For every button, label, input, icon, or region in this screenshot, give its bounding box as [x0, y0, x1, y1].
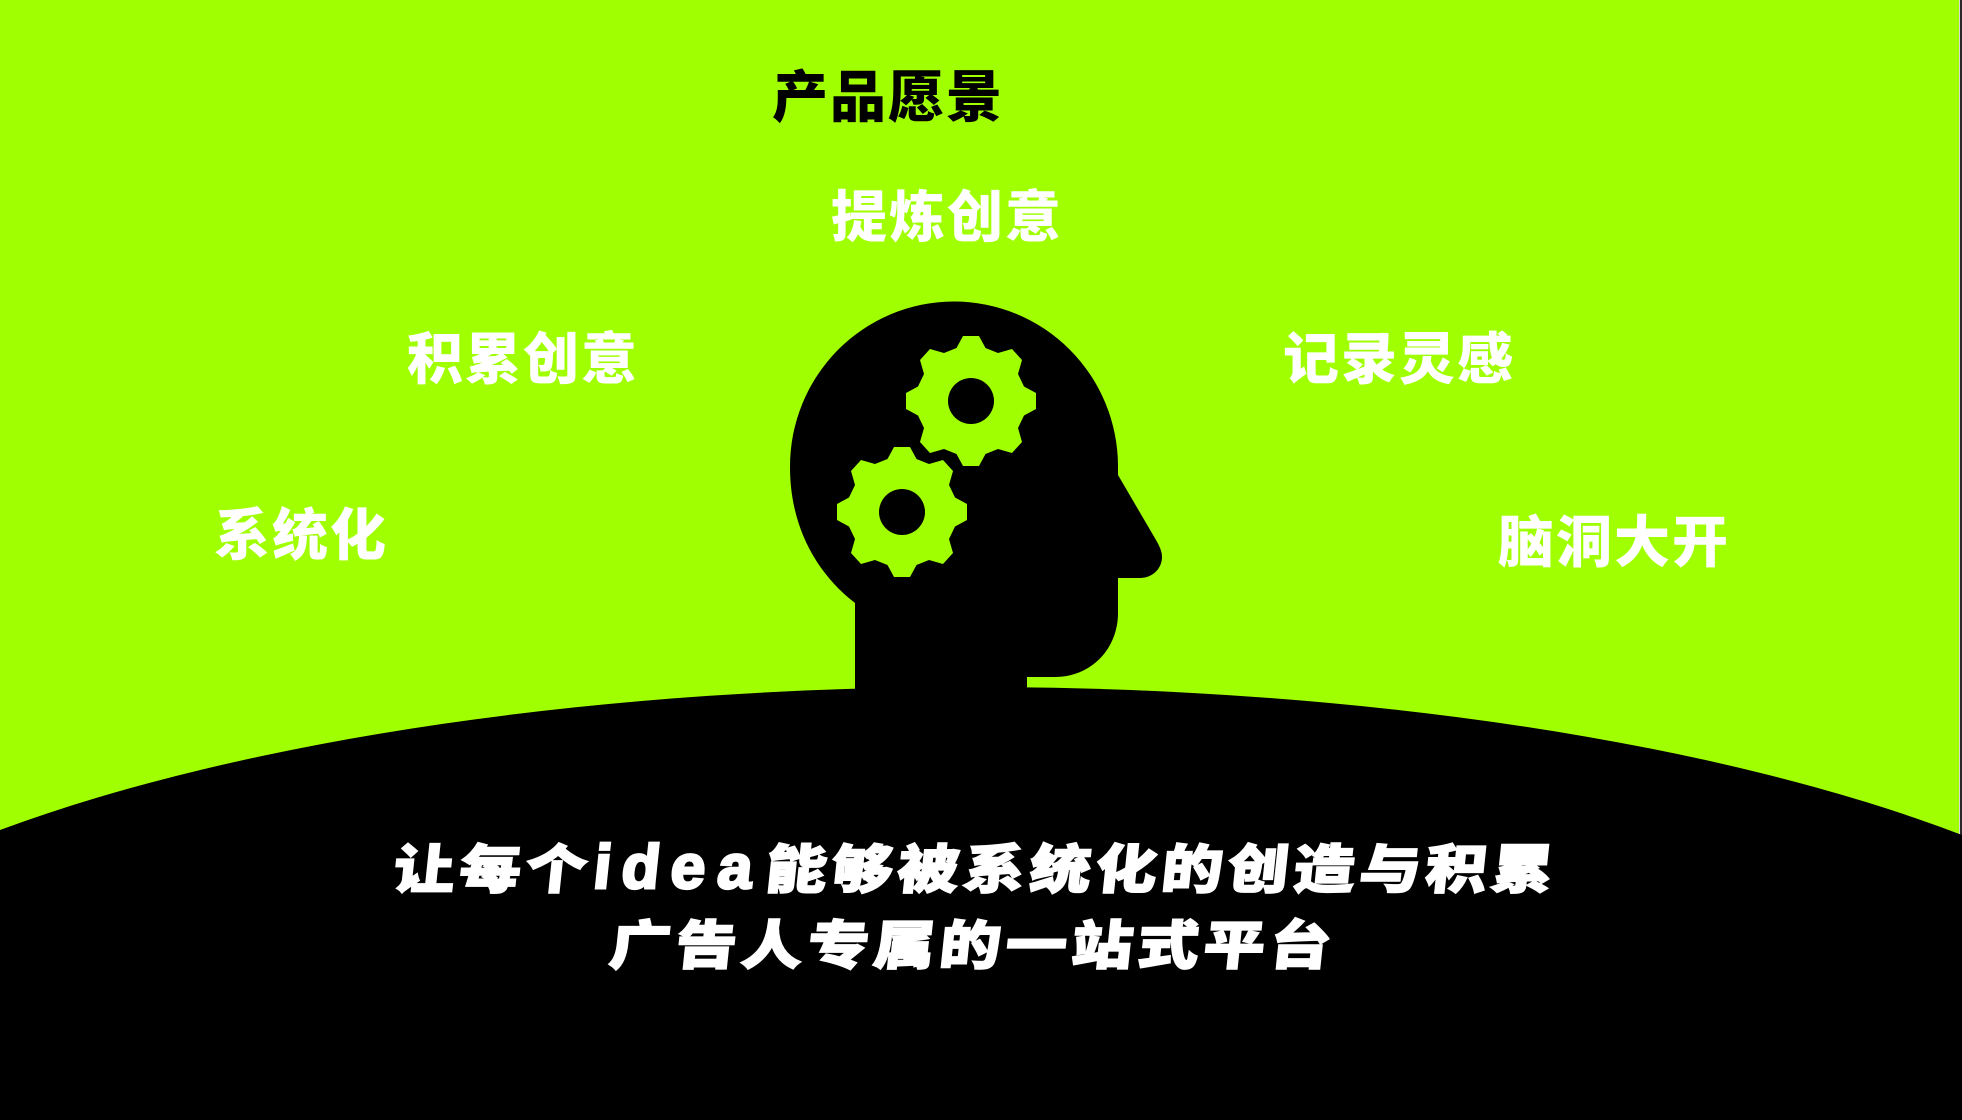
label: record inspiration: 记录灵感 [1283, 328, 1515, 391]
slogan line 1: 让每个 [391, 841, 590, 900]
label: refine ideas: 提炼创意 [831, 186, 1063, 249]
black hill base [0, 687, 1962, 1120]
slogan line 1: idea [591, 833, 757, 902]
icon: head with gears [790, 301, 1162, 700]
label: accumulate ideas: 积累创意 [407, 328, 639, 391]
head silhouette [790, 301, 1162, 700]
label: open mind: 脑洞大开 [1498, 511, 1730, 574]
icon: lower gear [837, 447, 967, 577]
slogan line 1: 能够被系统化的创造与积累 [763, 841, 1556, 900]
icon: upper gear [906, 336, 1036, 466]
slogan line 1 [391, 833, 1556, 902]
label: systematize: 系统化 [214, 504, 388, 567]
title: 产品愿景 [772, 66, 1004, 129]
slogan line 2: 广告人专属的一站式平台 [607, 917, 1334, 976]
